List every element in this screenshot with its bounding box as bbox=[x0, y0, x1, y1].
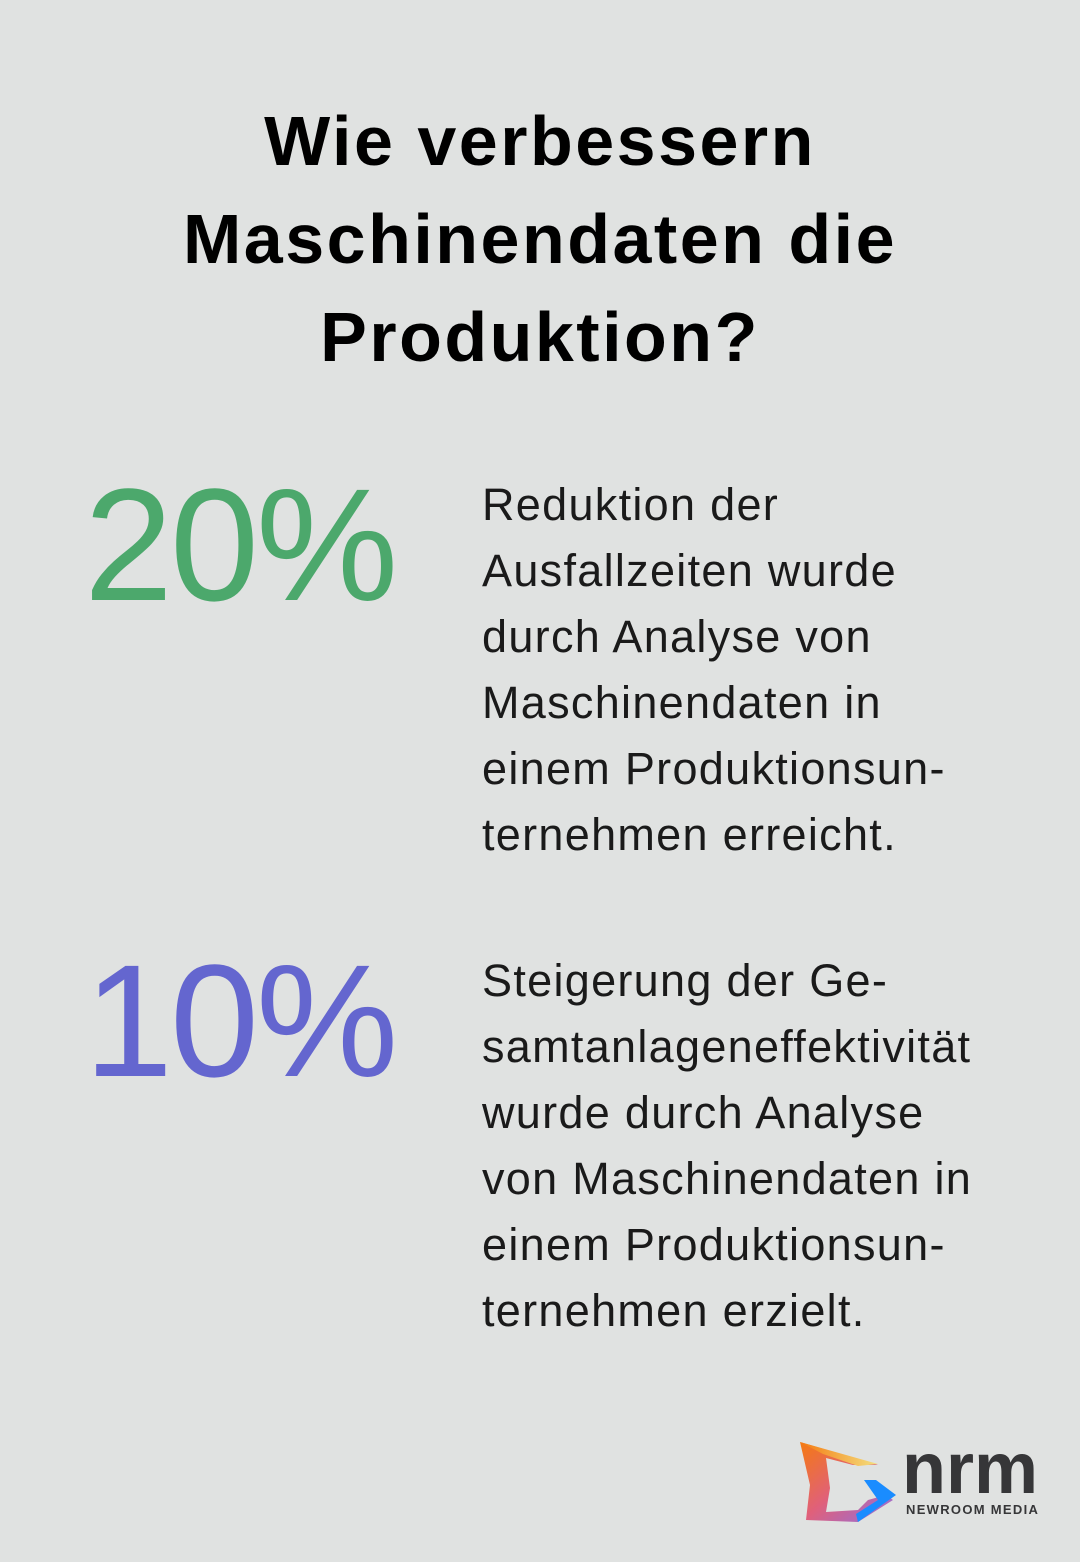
stat 1 number: 20% bbox=[84, 455, 395, 634]
stat 1 text: Maschinendaten in bbox=[482, 677, 882, 728]
stat 1 text: Ausfallzeiten wurde bbox=[482, 545, 897, 596]
stat 2 text: einem Produktionsun- bbox=[482, 1219, 946, 1270]
stat 1 text bbox=[482, 479, 946, 860]
logo: NEWROOM MEDIA bbox=[906, 1502, 1039, 1517]
title bbox=[183, 102, 897, 376]
logo: nrm bbox=[902, 1429, 1038, 1509]
stat 2 text bbox=[482, 955, 972, 1336]
title: Maschinendaten die bbox=[183, 200, 897, 278]
stat 2 text: wurde durch Analyse bbox=[482, 1087, 924, 1138]
logo bbox=[800, 1429, 1039, 1522]
title: Produktion? bbox=[320, 298, 760, 376]
stat 2 text: ternehmen erzielt. bbox=[482, 1285, 866, 1336]
stat 1 text: Reduktion der bbox=[482, 479, 779, 530]
stat 2 text: von Maschinendaten in bbox=[482, 1153, 972, 1204]
title: Wie verbessern bbox=[264, 102, 816, 180]
stat 1 text: ternehmen erreicht. bbox=[482, 809, 897, 860]
stat 2 number: 10% bbox=[84, 931, 395, 1110]
stat 1 text: durch Analyse von bbox=[482, 611, 872, 662]
stat 2 text: samtanlageneffektivität bbox=[482, 1021, 971, 1072]
stat 2 text: Steigerung der Ge- bbox=[482, 955, 888, 1006]
stat 1 text: einem Produktionsun- bbox=[482, 743, 946, 794]
